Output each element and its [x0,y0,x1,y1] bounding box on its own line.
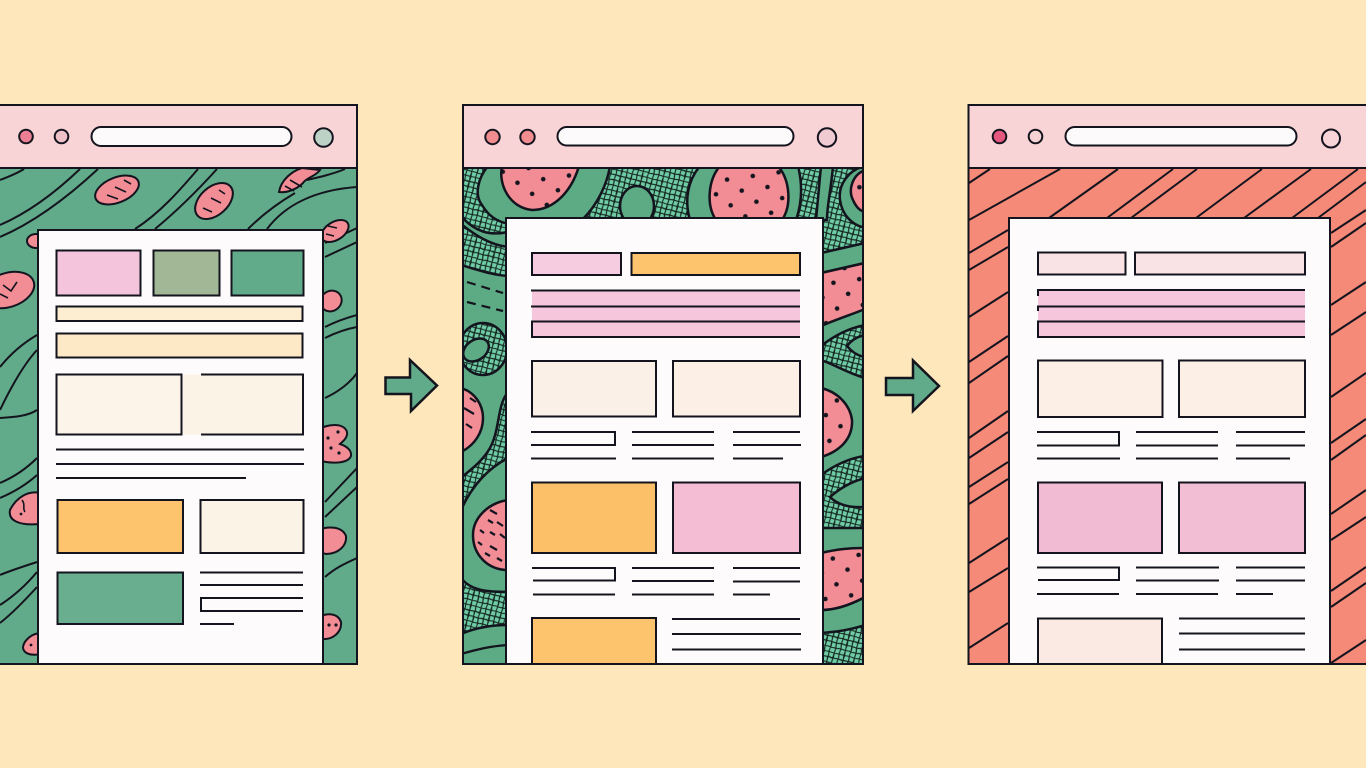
profile circle [314,128,333,147]
tab tile pink [532,253,621,275]
header tile: green [232,250,304,296]
browser bar [463,105,863,168]
header tile: sage [154,250,220,296]
pink striped band [1038,290,1305,337]
green block [58,572,183,624]
pink striped band [531,290,800,337]
browser bar [0,105,357,168]
window dot one [19,130,33,143]
tab tile left [1038,252,1126,274]
cream block right [673,361,800,416]
panel frame [463,105,863,664]
panel: third browser page, red striped pattern [968,105,1366,664]
pink block left [1038,482,1162,553]
window dot two [55,130,68,143]
address field [92,127,292,146]
text lines [56,450,304,478]
orange block bottom [532,618,656,664]
profile circle [818,128,836,147]
arrow: second to third page [886,360,939,411]
orange block [58,500,183,553]
pink block right [1179,482,1305,553]
pink block [673,482,800,553]
window dot one [485,130,500,144]
panel: second browser page, dense mosaic pattern [459,105,865,666]
text columns row two [532,568,800,594]
cream block bottom [1038,618,1162,664]
header tile: pink [56,250,140,296]
cream block left [532,361,656,416]
window dot one [993,130,1006,143]
banner bar two [56,334,302,358]
panel: first browser page, green leaf pattern [0,105,357,664]
window dot two [1029,130,1042,143]
cream block left [1038,360,1162,417]
content sheet [1009,218,1330,664]
panel frame [968,105,1366,664]
cream block lower [200,500,304,553]
cream block right [183,374,303,434]
text columns row one [531,432,801,458]
profile circle [1322,130,1340,148]
pattern background: mosaic with blobs [459,166,865,666]
address field [558,127,794,146]
pattern background: green with leaves [0,168,357,664]
tab tile right [1135,252,1305,274]
text lines bottom [672,619,801,650]
arrow: first to second page [386,360,437,411]
tab tile orange [632,253,800,275]
content sheet [506,218,823,664]
address field [1066,127,1296,146]
infographic canvas [0,104,1366,665]
cream block right [1179,360,1305,417]
text lines bottom [1179,618,1305,650]
text lines lower [200,572,303,624]
panel frame [0,105,357,664]
cream block left [56,374,182,434]
browser bar [968,105,1366,168]
banner bar one [56,306,302,321]
text columns row two [1037,568,1305,594]
orange block [532,482,656,553]
content sheet [38,230,323,664]
window dot two [520,130,535,144]
pattern background: salmon with diagonal lines [968,168,1366,664]
text columns row one [1037,432,1305,458]
